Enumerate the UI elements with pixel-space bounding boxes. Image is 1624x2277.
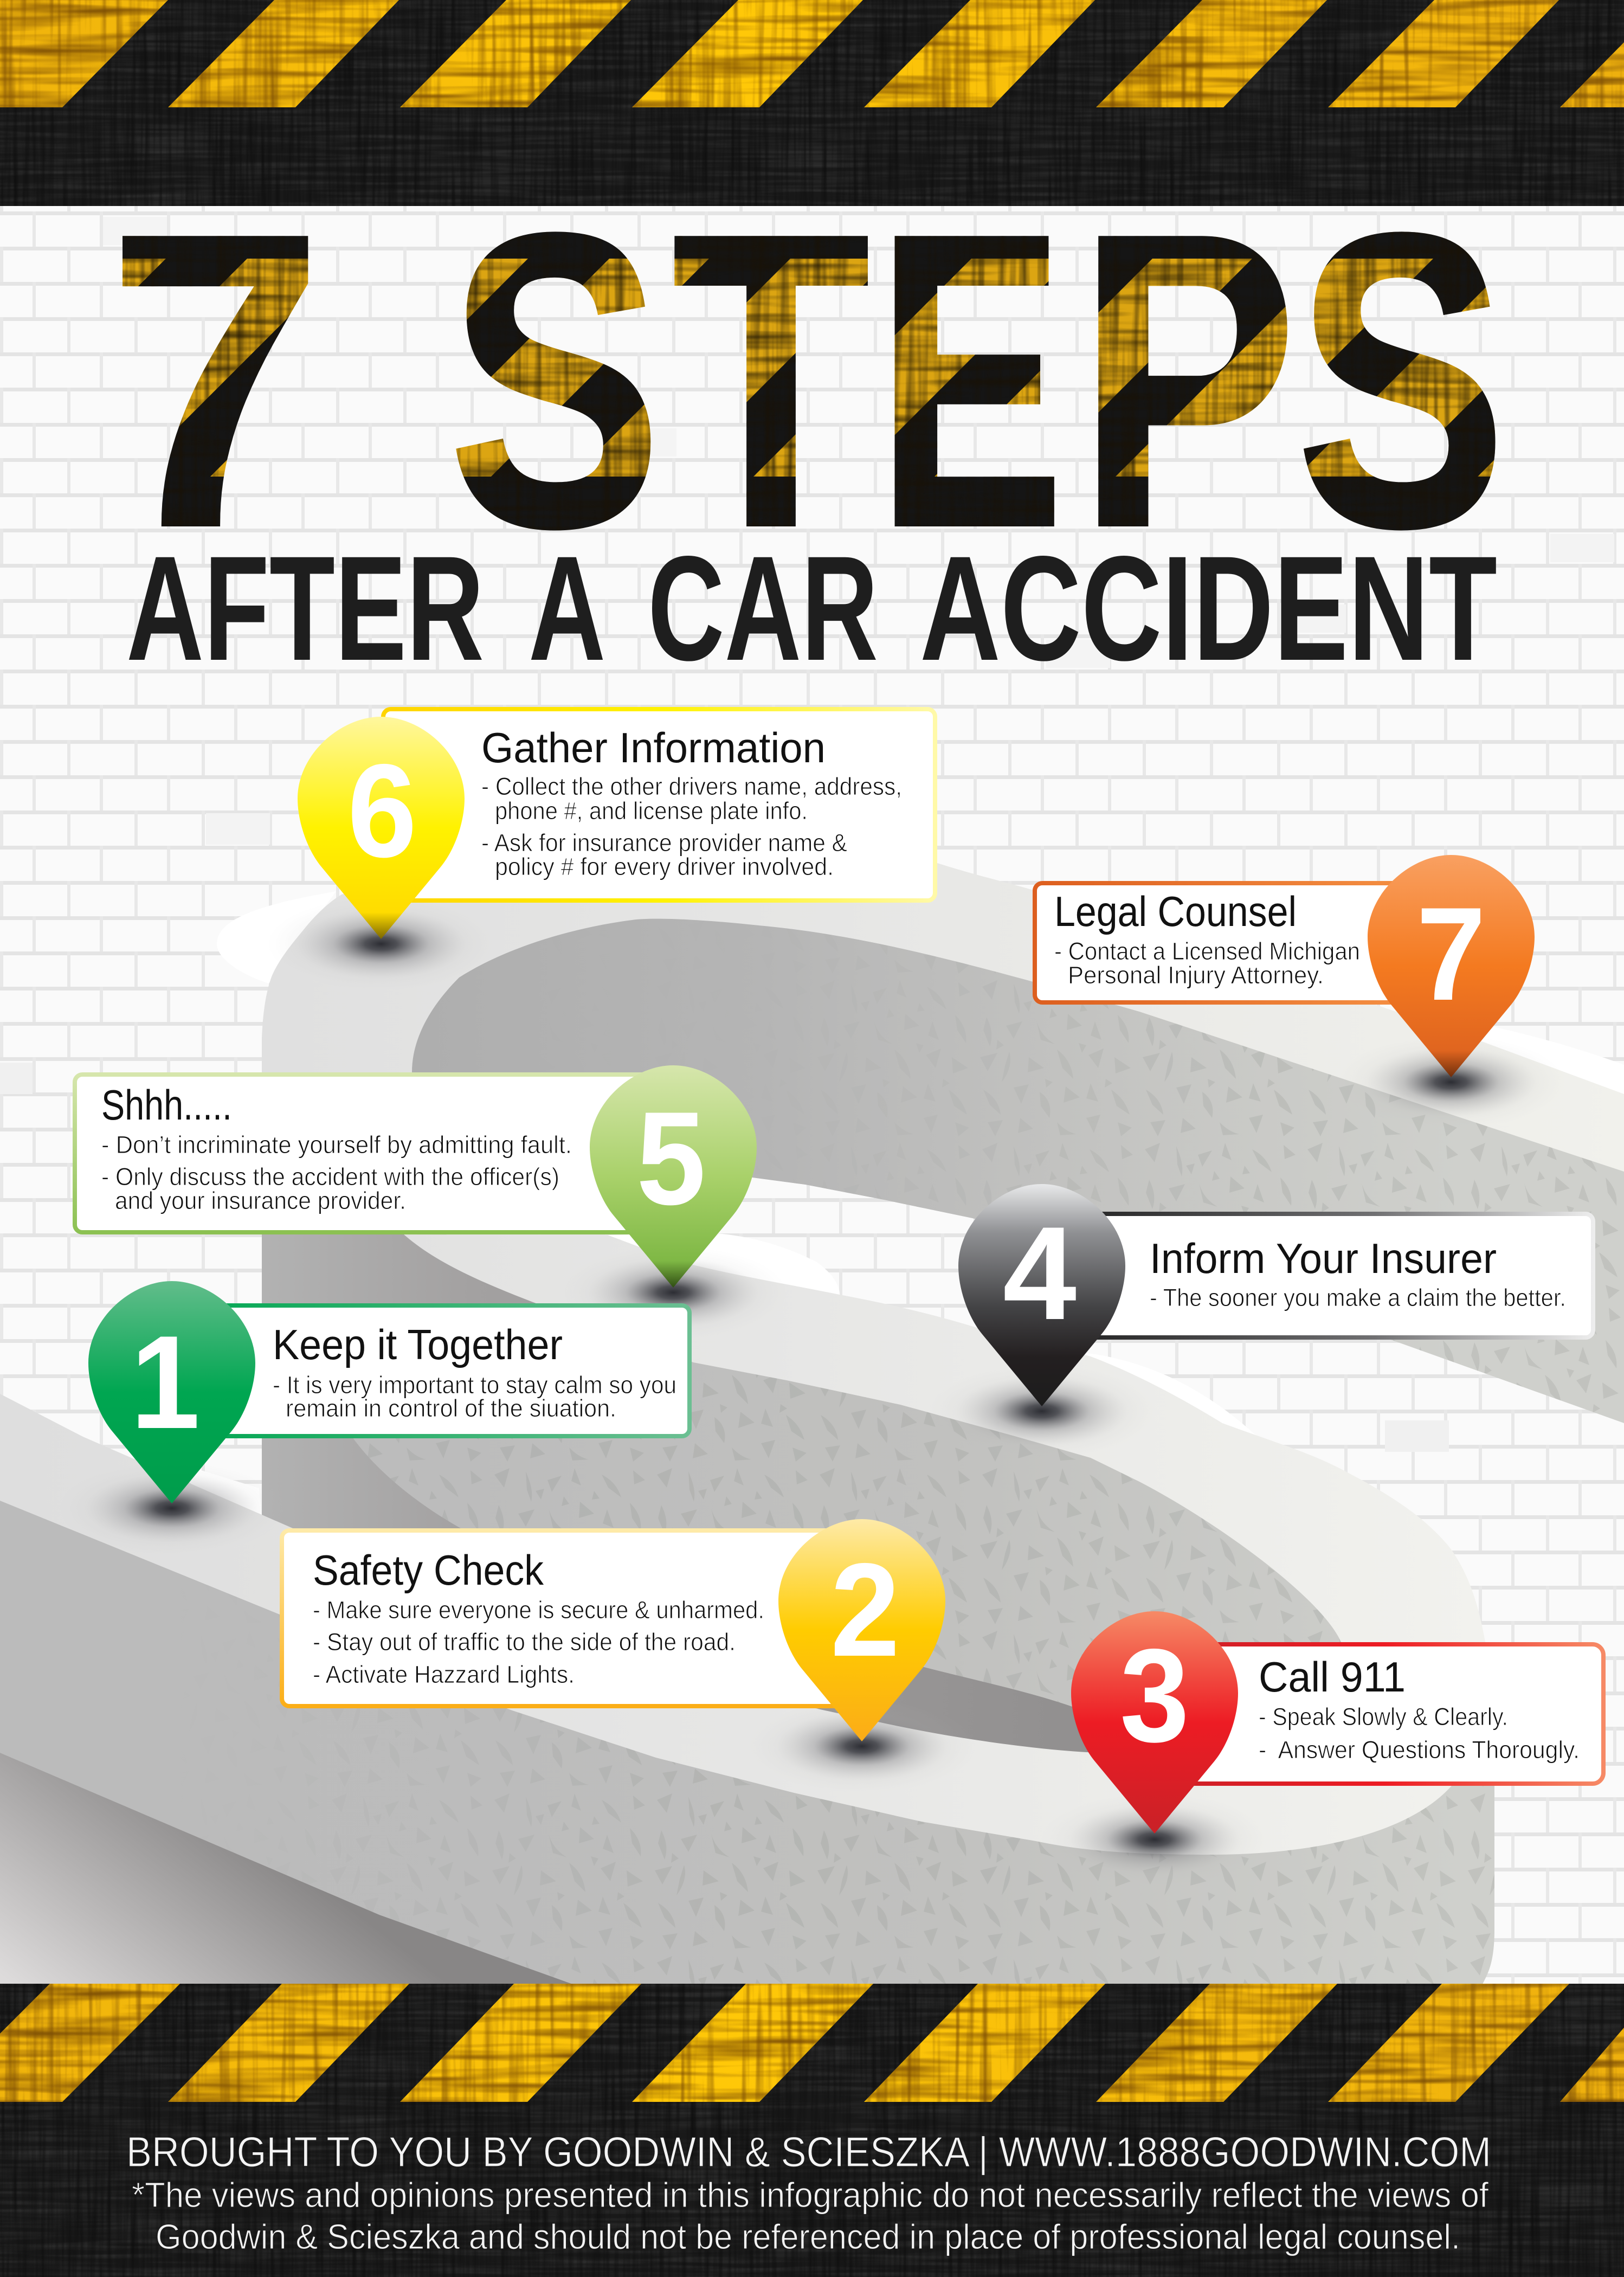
text 3: - Answer Questions Thorougly.: [1259, 1736, 1580, 1764]
step 5: shhh: [75, 1065, 757, 1288]
title: 7 STEPS: E: [877, 147, 1064, 614]
subtitle: after a car accident: AFTER: [126, 525, 484, 692]
number 1: 1: [131, 1308, 200, 1456]
title: 7 STEPS: T: [672, 147, 870, 614]
text 7: [1054, 937, 1360, 989]
step 3: call 911: [1071, 1611, 1603, 1834]
subtitle: after a car accident: A: [529, 525, 604, 692]
pin 2: [778, 1519, 945, 1741]
text 3: [1259, 1703, 1580, 1764]
heading 2: Safety Check: [313, 1546, 544, 1594]
pin 1: [88, 1281, 255, 1503]
number 5: 5: [636, 1084, 706, 1232]
pin 6: [298, 717, 465, 939]
heading 5: Shhh.....: [101, 1081, 232, 1129]
card 2: [282, 1530, 856, 1706]
text 6: - Collect the other drivers name, address,: [481, 773, 902, 800]
pin shadows on road: [58, 898, 1565, 1886]
text 2: [313, 1596, 764, 1688]
text 2: - Activate Hazzard Lights.: [313, 1661, 575, 1688]
card 3: [1165, 1644, 1603, 1784]
text 6: policy # for every driver involved.: [495, 853, 834, 880]
heading 6: Gather Information: [481, 724, 826, 771]
step 4: inform your insurer: [958, 1184, 1593, 1406]
number 7: 7: [1416, 879, 1486, 1028]
step 2: safety check: [282, 1519, 945, 1741]
top hazard band: [0, 0, 1624, 206]
road bottom-left shaded wall: [0, 1753, 573, 1984]
footer text: BROUGHT TO YOU BY GOODWIN & SCIESZKA | WWW.1888GOODWIN.COM: [126, 2128, 1491, 2176]
footer text: [126, 2128, 1491, 2256]
text 5: - Only discuss the accident with the officer(s): [101, 1163, 559, 1191]
text 2: - Make sure everyone is secure & unharmed.: [313, 1596, 764, 1624]
pin 3: [1071, 1611, 1238, 1834]
text 3: - Speak Slowly & Clearly.: [1259, 1703, 1508, 1731]
card 1: [179, 1305, 689, 1436]
road wall texture flakes: [368, 1005, 1621, 1984]
footer text: *The views and opinions presented in this infographic do not necessarily reflect the views of: [132, 2175, 1489, 2215]
heading 3: Call 911: [1259, 1653, 1406, 1701]
heading 4: Inform Your Insurer: [1150, 1234, 1497, 1282]
title: 7 STEPS: S: [1296, 147, 1506, 614]
card 5: [75, 1075, 687, 1232]
pin 5: [590, 1065, 757, 1288]
text 6: [481, 773, 902, 880]
step 1: keep it together: [88, 1281, 689, 1503]
text 6: - Ask for insurance provider name &: [481, 829, 847, 857]
text 7: Personal Injury Attorney.: [1068, 961, 1324, 989]
road upper surface: [262, 829, 1624, 1231]
number 4: 4: [1003, 1199, 1077, 1347]
road side walls: [0, 867, 1624, 1984]
road highlight: back edges: [163, 891, 1624, 1518]
road S-curve surface: [0, 1234, 1487, 1855]
step 6: gather information: [298, 709, 935, 939]
text 1: [273, 1371, 676, 1422]
title: 7 STEPS: S: [448, 147, 662, 614]
text 1: - It is very important to stay calm so you: [273, 1371, 676, 1399]
card 7: [1035, 883, 1447, 1002]
text 2: - Stay out of traffic to the side of the road.: [313, 1628, 736, 1656]
number 6: 6: [347, 736, 417, 885]
title: 7 STEPS: P: [1078, 147, 1297, 614]
number 3: 3: [1120, 1621, 1189, 1770]
number 2: 2: [830, 1535, 900, 1684]
bottom hazard band: [0, 1984, 1624, 2277]
card 4: [1046, 1214, 1593, 1337]
footer text: Goodwin & Scieszka and should not be referenced in place of professional legal counsel.: [156, 2217, 1460, 2256]
text 4: - The sooner you make a claim the better.: [1150, 1284, 1566, 1311]
text 5: and your insurance provider.: [115, 1187, 406, 1214]
road dark inner wedge: [262, 1225, 1106, 1759]
pin 4: [958, 1184, 1125, 1406]
road wall shading: [0, 867, 1624, 1984]
pin 7: [1368, 855, 1535, 1077]
text 5: - Don’t incriminate yourself by admitting fault.: [101, 1131, 572, 1159]
text 1: remain in control of the siuation.: [286, 1394, 616, 1422]
title: 7 STEPS: 7: [107, 147, 324, 614]
subtitle: after a car accident: CAR: [648, 525, 878, 692]
road: winding S-shaped highway: [0, 829, 1624, 1984]
step 7: legal counsel: [1035, 855, 1535, 1077]
text 5: [101, 1131, 572, 1214]
heading 7: Legal Counsel: [1054, 887, 1297, 935]
text 7: - Contact a Licensed Michigan: [1054, 937, 1360, 965]
text 6: phone #, and license plate info.: [495, 797, 808, 825]
heading 1: Keep it Together: [273, 1321, 563, 1368]
card 6: [383, 709, 935, 900]
